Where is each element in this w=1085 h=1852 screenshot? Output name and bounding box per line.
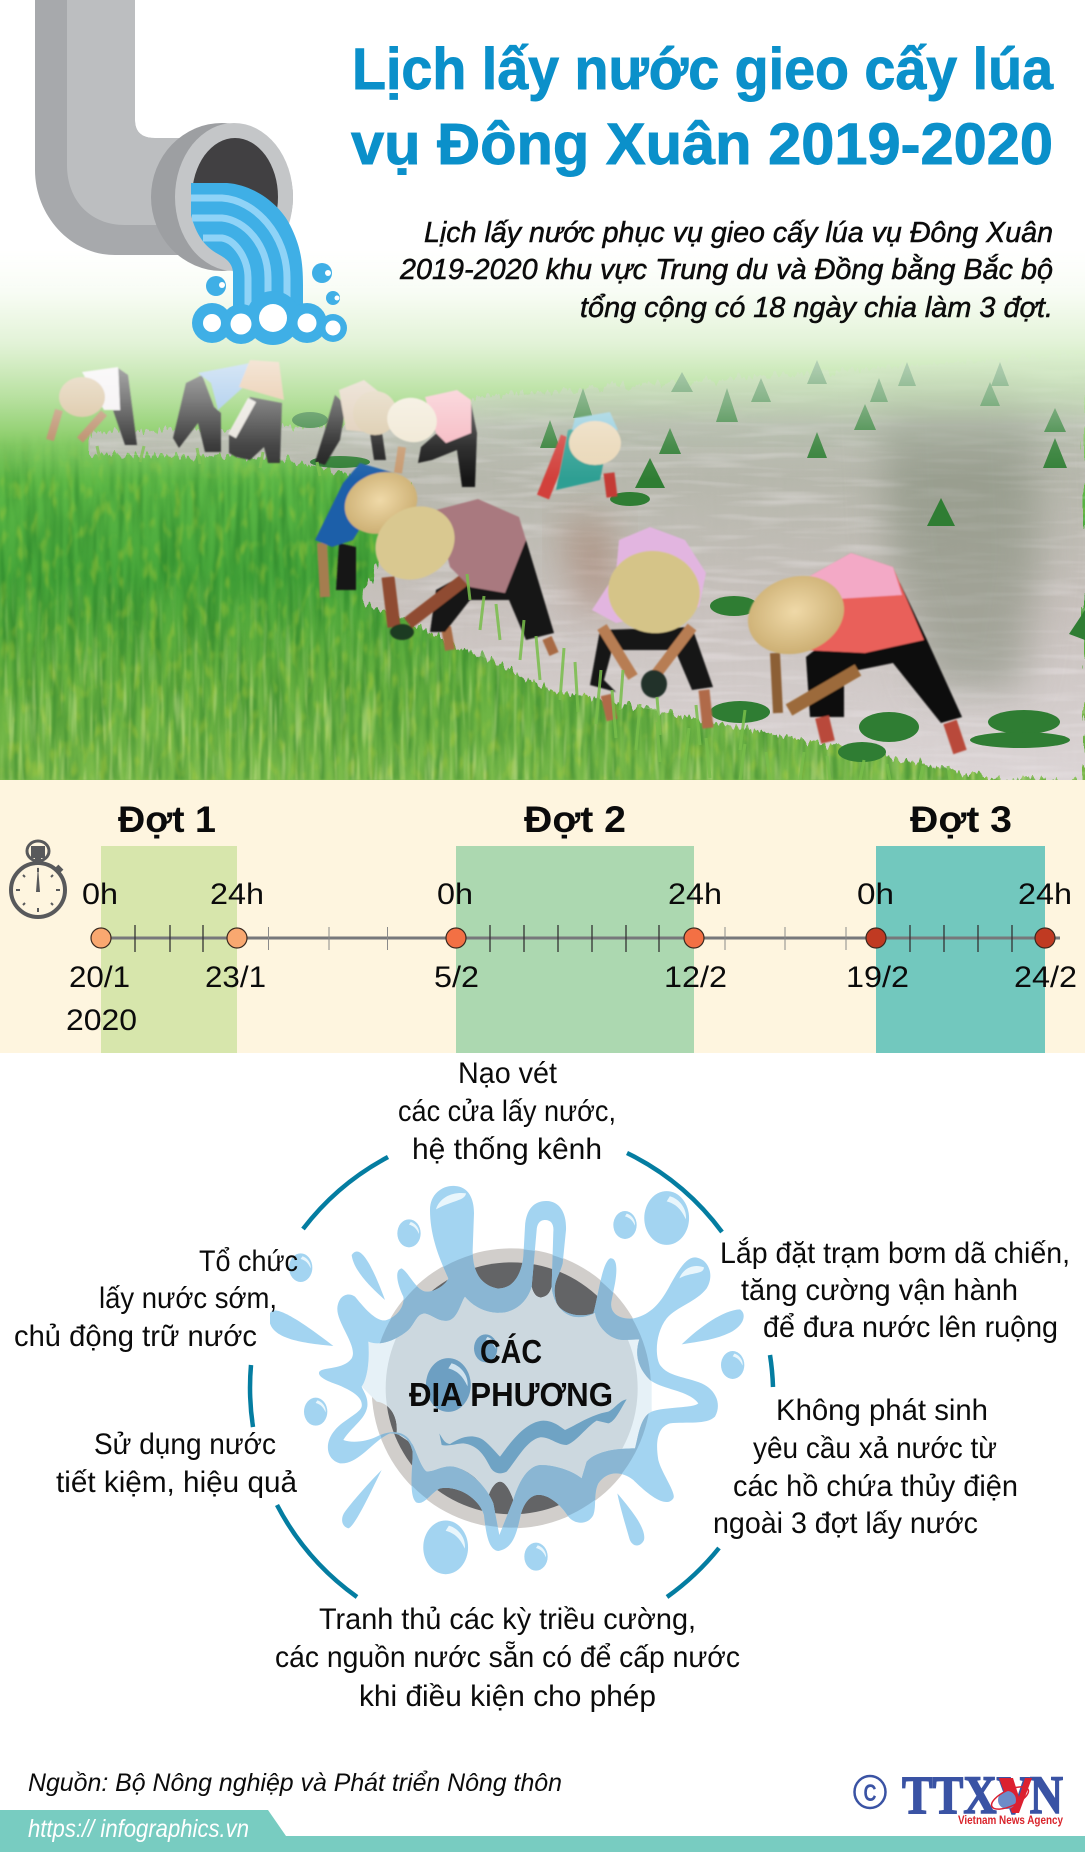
water droplets: [289, 1191, 744, 1574]
photo: farmers transplanting rice in a flooded paddy: [0, 250, 1085, 780]
date labels: 20/1: [69, 961, 130, 994]
intro text: tổng cộng có 18 ngày chia làm 3 đợt.: [580, 292, 1053, 324]
central label: CÁC: [480, 1333, 542, 1370]
central label: [409, 1333, 613, 1413]
farmer in striped shirt: [362, 492, 554, 654]
text block: high tides: các nguồn nước sẵn có để cấp nước: [275, 1641, 740, 1674]
footer bar with website: [0, 1810, 1085, 1852]
text block: dredging: hệ thống kênh: [412, 1133, 602, 1166]
text block: early intake: chủ động trữ nước: [14, 1320, 257, 1353]
grey disc: [372, 1248, 652, 1528]
text block: dredging: Nạo vét: [458, 1057, 558, 1090]
hour labels: 0h: [857, 878, 894, 911]
date labels: 5/2: [434, 961, 479, 994]
text block: high tides: khi điều kiện cho phép: [359, 1680, 656, 1713]
logo: TTXVN Vietnam News Agency: [854, 1765, 1063, 1827]
text block: early intake: Tổ chức: [199, 1245, 298, 1278]
title: Lịch lấy nước gieo cấy lúa: [352, 37, 1054, 102]
misty fade over the top of the photo: [0, 250, 1085, 480]
farmers: [50, 360, 962, 752]
text block: efficient use: tiết kiệm, hiệu quả: [56, 1466, 297, 1499]
farmers back row centre: [315, 380, 477, 487]
date labels: [66, 961, 1077, 1037]
period headings: Đợt 3: [910, 799, 1012, 840]
title: vụ Đông Xuân 2019-2020: [351, 112, 1053, 177]
icon: stopwatch: [11, 841, 65, 917]
hour labels: 0h: [437, 878, 473, 911]
hour labels: 24h: [210, 878, 264, 911]
text block: no extra discharge requests: ngoài 3 đợt lấy nước: [713, 1507, 978, 1540]
text block: high tides: Tranh thủ các kỳ triều cường,: [319, 1603, 696, 1636]
period headings: Đợt 1: [118, 799, 216, 840]
text block: early intake: lấy nước sớm,: [99, 1282, 277, 1315]
period headings: [118, 799, 1012, 840]
farmer in pink and red shirt: [738, 553, 962, 752]
splash spikes: [270, 1251, 744, 1545]
date labels: 23/1: [205, 961, 266, 994]
seedling bundles in the water: [292, 360, 1085, 762]
icon: water pipe with gushing water: [35, 0, 347, 345]
farmer with teal shirt: [543, 412, 621, 497]
splash band: [319, 1186, 718, 1551]
date labels: 12/2: [664, 961, 727, 994]
text block: efficient use: Sử dụng nước: [94, 1428, 276, 1461]
text block: dredging: [398, 1057, 616, 1166]
central label: ĐỊA PHƯƠNG: [409, 1376, 613, 1413]
title: [351, 37, 1054, 177]
intro text: 2019-2020 khu vực Trung du và Đồng bằng Bắc bộ: [399, 253, 1053, 286]
hour labels: 24h: [1018, 878, 1072, 911]
river squiggle: [439, 1399, 627, 1473]
source note: Nguồn: Bộ Nông nghiệp và Phát triển Nông thôn: [28, 1769, 562, 1797]
text block: no extra discharge requests: yêu cầu xả nước từ: [753, 1432, 997, 1465]
date labels: 24/2: [1014, 961, 1077, 994]
footer bar with website: https:// infographics.vn: [28, 1815, 249, 1843]
text block: field pumping stations: [720, 1237, 1070, 1344]
text block: field pumping stations: tăng cường vận hành: [741, 1274, 1018, 1307]
panel: timeline of water intake periods: [0, 780, 1085, 1053]
text block: field pumping stations: để đưa nước lên ruộng: [763, 1311, 1058, 1344]
intro text: Lịch lấy nước phục vụ gieo cấy lúa vụ Đông Xuân: [424, 217, 1053, 249]
hour labels: [82, 878, 1072, 911]
farmer in light blue shirt: [173, 363, 259, 452]
text block: no extra discharge requests: [713, 1394, 1018, 1540]
hour labels: 24h: [668, 878, 722, 911]
flooded paddy water: [88, 369, 1085, 780]
text block: dredging: các cửa lấy nước,: [398, 1095, 616, 1128]
inner pale area: [362, 1286, 652, 1500]
intro text: [399, 217, 1053, 324]
period bands: [101, 846, 1045, 1053]
timeline axis: [91, 925, 1060, 952]
period headings: Đợt 2: [524, 799, 626, 840]
hour labels: 0h: [82, 878, 118, 911]
date labels: 2020: [66, 1004, 137, 1037]
central water splash illustration: [270, 1186, 744, 1574]
text block: no extra discharge requests: Không phát sinh: [776, 1394, 988, 1427]
farmer blue shirt: [315, 462, 426, 597]
text block: early intake: [14, 1245, 298, 1353]
rice field grass: [0, 250, 1085, 780]
farmer bending in grey shirt: [229, 360, 284, 463]
text block: field pumping stations: Lắp đặt trạm bơm dã chiến,: [720, 1237, 1070, 1270]
foreground rice blades: [97, 446, 950, 780]
farmer in lavender shirt: [590, 527, 713, 728]
farmer far left: [50, 367, 137, 445]
logo: TTXVN Vietnam News Agency: C: [864, 1780, 876, 1807]
ring arcs around the central diagram: [250, 1153, 773, 1597]
text block: no extra discharge requests: các hồ chứa thủy điện: [733, 1470, 1018, 1503]
logo: TTXVN Vietnam News Agency: Vietnam News Agency: [958, 1813, 1063, 1827]
text block: efficient use: [56, 1428, 297, 1499]
text block: high tides: [275, 1603, 740, 1713]
date labels: 19/2: [846, 961, 909, 994]
